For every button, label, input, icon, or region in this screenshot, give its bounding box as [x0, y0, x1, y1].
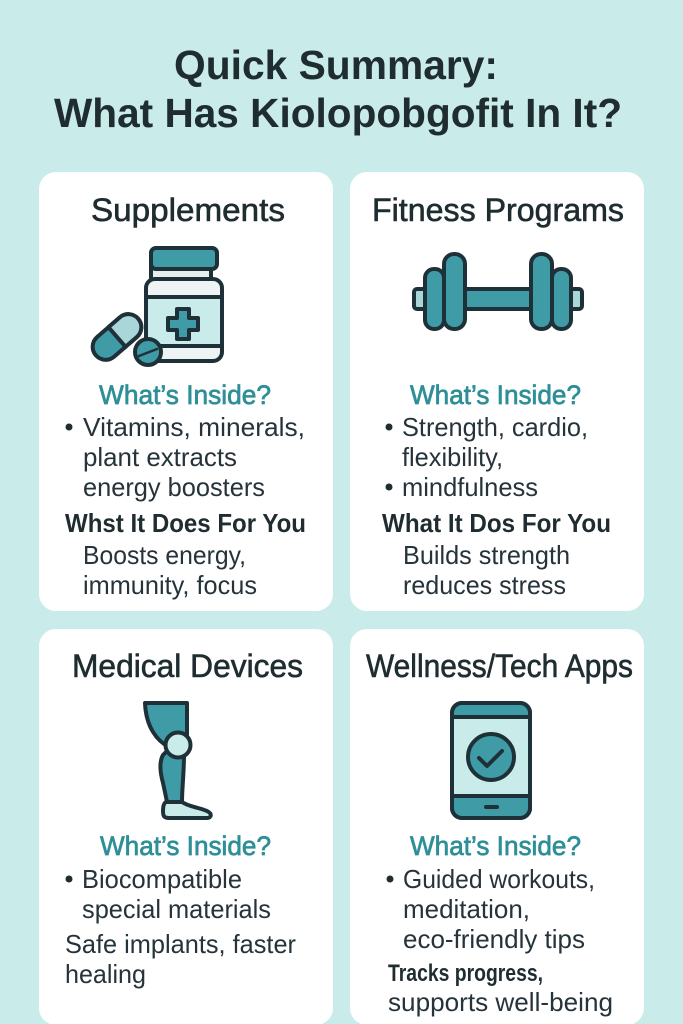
what's inside: apps: eco-friendly tips: [403, 924, 585, 954]
what it does: supplements: immunity, focus: [83, 570, 257, 600]
panel: fitness programs: [350, 172, 644, 611]
what it does: apps: [388, 960, 613, 1017]
icon: dumbbell: [414, 254, 582, 329]
title: [54, 42, 622, 136]
what's inside: supplements: What’s Inside?: [99, 380, 271, 410]
title: What Has Kiolopobgofit In It?: [54, 90, 622, 136]
what it does: medical: Safe implants, faster: [65, 929, 296, 959]
what's inside: supplements: energy boosters: [83, 472, 265, 502]
what it does: fitness: reduces stress: [403, 570, 566, 600]
what's inside: medical: [66, 831, 271, 924]
what's inside: fitness: mindfulness: [402, 472, 538, 502]
icon: phone with check: [452, 703, 530, 818]
panel: wellness/tech apps: [350, 629, 644, 1024]
what's inside: apps: What’s Inside?: [410, 831, 581, 861]
what's inside: supplements: [66, 380, 305, 502]
what's inside: fitness: flexibility,: [402, 442, 503, 472]
panel: medical devices: [39, 629, 333, 1024]
what it does: supplements: [65, 508, 306, 600]
what it does: medical: healing: [65, 959, 146, 989]
what's inside: apps: meditation,: [403, 894, 530, 924]
what's inside: fitness: What’s Inside?: [410, 380, 581, 410]
heading: supplements: Supplements: [91, 192, 285, 228]
icon: prosthetic leg: [145, 703, 211, 818]
what it does: medical: [65, 929, 296, 989]
what's inside: medical: Biocompatible: [82, 864, 242, 894]
what it does: supplements: Boosts energy,: [83, 540, 246, 570]
what's inside: apps: Guided workouts,: [403, 864, 595, 894]
what's inside: apps: [386, 831, 595, 954]
panel: supplements: [39, 172, 333, 611]
what it does: fitness: Builds strength: [403, 540, 570, 570]
what it does: apps: supports well-being: [388, 987, 613, 1017]
what's inside: fitness: Strength, cardio,: [402, 412, 588, 442]
what's inside: fitness: [386, 380, 588, 502]
heading: wellness/tech apps: Wellness/Tech Apps: [366, 648, 633, 684]
what it does: supplements: Whst It Does For You: [65, 508, 306, 538]
what's inside: supplements: plant extracts: [83, 442, 237, 472]
title: Quick Summary:: [174, 42, 498, 88]
what it does: apps: Tracks progress,: [388, 960, 543, 987]
heading: medical devices: Medical Devices: [72, 648, 303, 684]
what's inside: supplements: Vitamins, minerals,: [83, 412, 305, 442]
what's inside: medical: What’s Inside?: [100, 831, 271, 861]
what it does: fitness: What It Dos For You: [382, 508, 611, 538]
heading: fitness programs: Fitness Programs: [372, 192, 624, 228]
what's inside: medical: special materials: [82, 894, 271, 924]
icon: pill bottle and pills: [87, 248, 222, 365]
what it does: fitness: [382, 508, 611, 600]
